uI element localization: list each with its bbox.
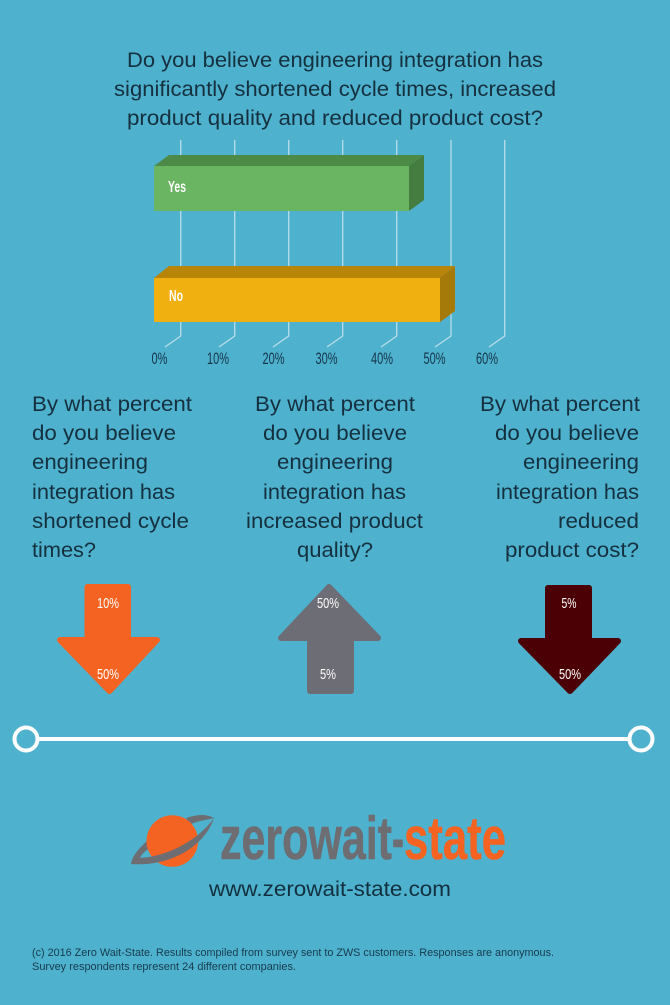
bar chart — [152, 140, 505, 368]
axis labels: 0% — [152, 349, 168, 368]
question: product cost: product cost? — [505, 538, 639, 562]
question: cycle times: integration has — [32, 480, 175, 504]
title: significantly shortened cycle times, increased — [114, 77, 556, 101]
question: product quality: engineering — [277, 450, 393, 474]
arrow: grey up: 5% — [320, 666, 336, 683]
arrow: grey up — [281, 587, 378, 691]
question: product quality: quality? — [297, 538, 373, 562]
question: product quality: do you believe — [263, 421, 407, 445]
bar: Yes: Yes — [168, 179, 186, 196]
title: product quality and reduced product cost? — [127, 106, 543, 130]
arrow: orange down: 50% — [97, 666, 119, 683]
axis labels: 10% — [207, 349, 229, 368]
footer note: Survey respondents represent 24 different companies. — [32, 961, 296, 973]
question: product cost — [480, 392, 640, 562]
arrow: orange down: 10% — [97, 595, 119, 612]
axis labels: 20% — [262, 349, 284, 368]
arrow: maroon down: 50% — [559, 666, 581, 683]
axis labels: 50% — [424, 349, 446, 368]
question: cycle times: times? — [32, 538, 96, 562]
question: product quality: increased product — [246, 509, 423, 533]
question: product cost: engineering — [523, 450, 639, 474]
arrow: maroon down: 5% — [562, 595, 576, 612]
question: product cost: do you believe — [495, 421, 639, 445]
axis labels: 60% — [476, 349, 498, 368]
question: product quality: By what percent — [255, 392, 415, 416]
wordmark: - — [392, 805, 404, 872]
arrow: grey up: 50% — [317, 595, 339, 612]
question: cycle times: shortened cycle — [32, 509, 189, 533]
arrow: maroon down — [521, 588, 618, 691]
wordmark: state — [404, 805, 506, 872]
bar: No — [154, 266, 455, 322]
question: product cost: By what percent — [480, 392, 640, 416]
logo — [131, 805, 506, 901]
title: Do you believe engineering integration has — [127, 48, 543, 72]
wordmark: zerowait — [220, 805, 392, 872]
icon: ringed planet — [131, 815, 214, 867]
bar: No: No — [169, 288, 183, 305]
question: product cost: reduced — [558, 509, 639, 533]
website: www.zerowait-state.com — [208, 878, 451, 901]
arrow: orange down — [60, 587, 157, 691]
question: cycle times: do you believe — [32, 421, 176, 445]
axis labels: 40% — [371, 349, 393, 368]
footer note — [32, 947, 554, 973]
footer note: (c) 2016 Zero Wait-State. Results compiled from survey sent to ZWS customers. Responses are anonymous. — [32, 947, 554, 959]
question: cycle times: engineering — [32, 450, 148, 474]
axis labels: 30% — [316, 349, 338, 368]
question: product quality: integration has — [263, 480, 406, 504]
question: cycle times: By what percent — [32, 392, 192, 416]
bar: Yes — [154, 155, 424, 211]
question: cycle times — [32, 392, 192, 562]
axis labels — [152, 349, 498, 368]
timeline connector — [14, 728, 652, 750]
title — [114, 48, 556, 130]
question: product cost: integration has — [496, 480, 639, 504]
question: product quality — [246, 392, 423, 562]
